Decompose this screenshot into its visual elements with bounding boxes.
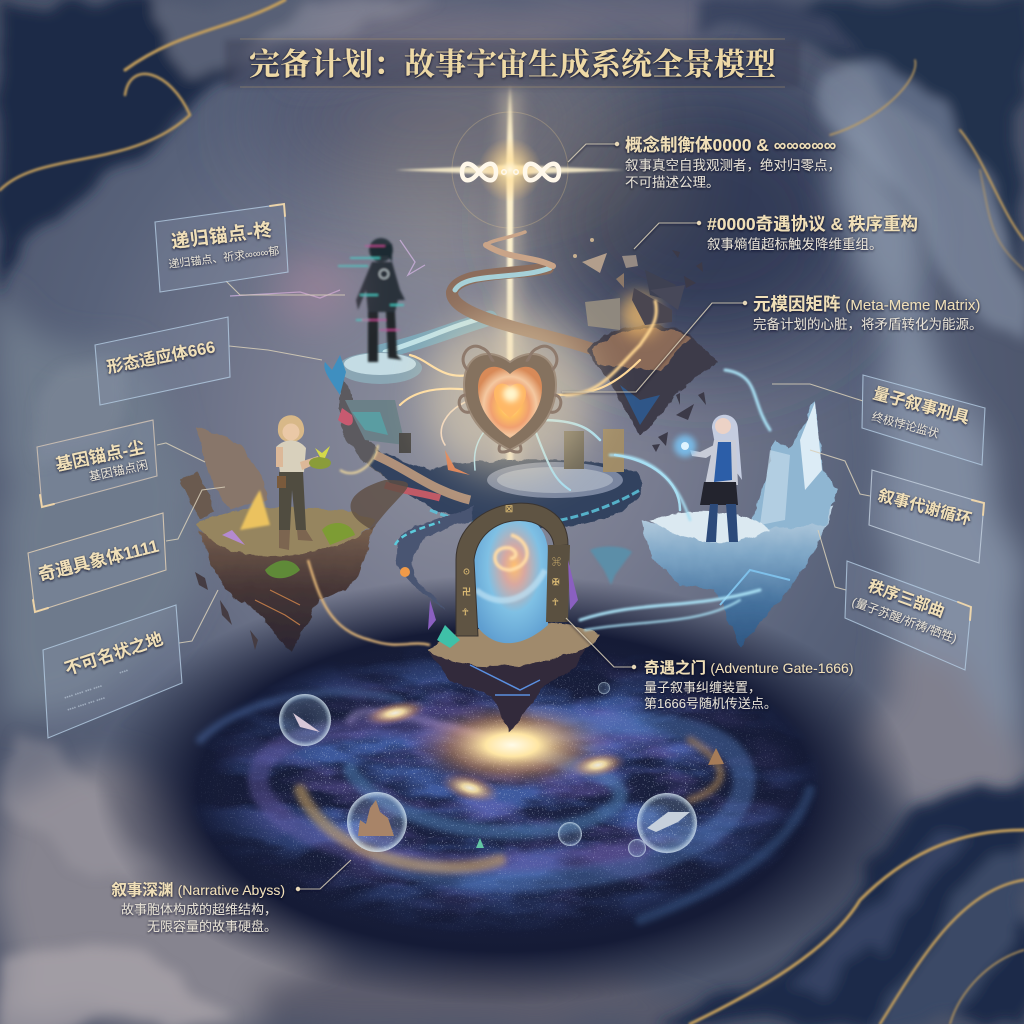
small floating ice shard [590,546,632,585]
panel: narrative metabolism: 叙事代谢循环 [876,486,974,529]
callout: concept balancer [568,135,841,190]
small spiral galaxies [359,694,630,810]
callout: narrative abyss: 故事胞体构成的超维结构， [121,902,277,917]
title text: 完备计划：故事宇宙生成系统全景模型 [249,39,776,84]
panel: quantum narrative tool [772,375,985,465]
callout: meta-meme matrix: 元模因矩阵 (Meta-Meme Matrix) [753,294,980,314]
callout: concept balancer: 概念制衡体0000 & ∞∞∞∞∞ [625,135,836,155]
callout: adventure gate [566,618,854,711]
panel: quantum narrative tool: 终极悖论监状 [870,409,941,441]
water streams [580,370,770,630]
panel: adventure concretion: 奇遇具象体1111 [36,536,161,585]
meta-meme heart [459,346,561,452]
panel: unnameable land: 不可名状之地 [62,628,165,679]
panel: order trilogy [818,530,971,670]
callout: concept balancer: 不可描述公理。 [625,175,720,190]
panel: adventure concretion [28,487,225,612]
callout: narrative abyss: 无限容量的故事硬盘。 [147,919,277,934]
panel: morph adapter: 形态适应体666 [105,336,217,377]
callout: adventure gate: 量子叙事纠缠装置， [644,680,761,695]
upper spiral paths [380,232,600,352]
panel: gene anchor: 基因锚点闲 [88,457,149,484]
blond adventurer [276,415,331,550]
panel: recursive anchor: 递归锚点-柊 [170,219,273,252]
heart glow [425,310,595,480]
silver haired girl [674,415,742,542]
gate crystals [568,560,578,610]
callout: narrative abyss: 叙事深渊 (Narrative Abyss) [111,880,285,899]
callout: protocol: #0000奇遇协议 & 秩序重构 [707,214,918,234]
panel: recursive anchor [155,204,345,295]
panel: recursive anchor: 递归锚点、祈求∞∞∞郁 [168,243,280,271]
panel: gene anchor: 基因锚点-尘 [54,437,147,475]
rock fragments [573,238,706,452]
platform with dark figure [230,238,450,500]
infinity symbols [462,164,559,180]
adventure gate arch: 卍 [462,587,471,597]
adventure gate arch: ☉ [462,567,471,577]
adventure gate arch: ✠ [552,577,560,587]
panel: unnameable land: •••• •••• ••• •••• [63,683,104,702]
callout: narrative abyss [111,860,351,934]
callout: protocol [634,214,918,252]
callout: meta-meme matrix [562,294,982,392]
adventure gate arch: ☥ [552,597,559,607]
callout: adventure gate: 第1666号随机传送点。 [644,696,777,711]
central light beam and star [340,60,680,485]
adventure gate arch: ☒ [505,504,513,514]
adventure gate arch: ☥ [462,607,469,617]
callout: concept balancer: 叙事真空自我观测者，绝对归零点， [625,157,841,173]
glitch figure [338,238,405,362]
gate island [395,503,600,732]
energy veins from heart [400,355,680,510]
callout: adventure gate: 奇遇之门 (Adventure Gate-1666) [644,658,854,677]
title bar [225,39,800,87]
ice island [580,370,838,647]
callout: meta-meme matrix: 完备计划的心脏，将矛盾转化为能源。 [753,316,982,332]
panel: unnameable land: •••• •••• ••• •••• [66,695,107,714]
broken upper right island [565,238,718,452]
fragments [195,572,258,650]
lightning behind figure [230,240,425,298]
panel: order trilogy: (量子苏醒/祈祷/牺牲) [850,594,959,646]
galaxy abyss [95,575,915,1005]
panel: order trilogy: 秩序三部曲 [866,576,947,621]
energy stream [565,300,656,395]
panel: narrative metabolism [810,450,984,563]
galaxy core [407,699,617,791]
adventure gate arch: ⌘ [552,557,561,567]
story bubbles [279,682,724,857]
panel: gene anchor [37,420,205,507]
panel: unnameable land: •••• [118,667,130,677]
adventure gate arch [456,503,570,643]
callout: protocol: 叙事熵值超标触发降维重组。 [707,237,882,252]
panel: unnameable land [43,590,218,738]
left earth island [180,415,430,652]
panel: morph adapter [95,317,322,405]
panel: quantum narrative tool: 量子叙事刑具 [871,384,972,428]
lower ring path [370,429,642,528]
